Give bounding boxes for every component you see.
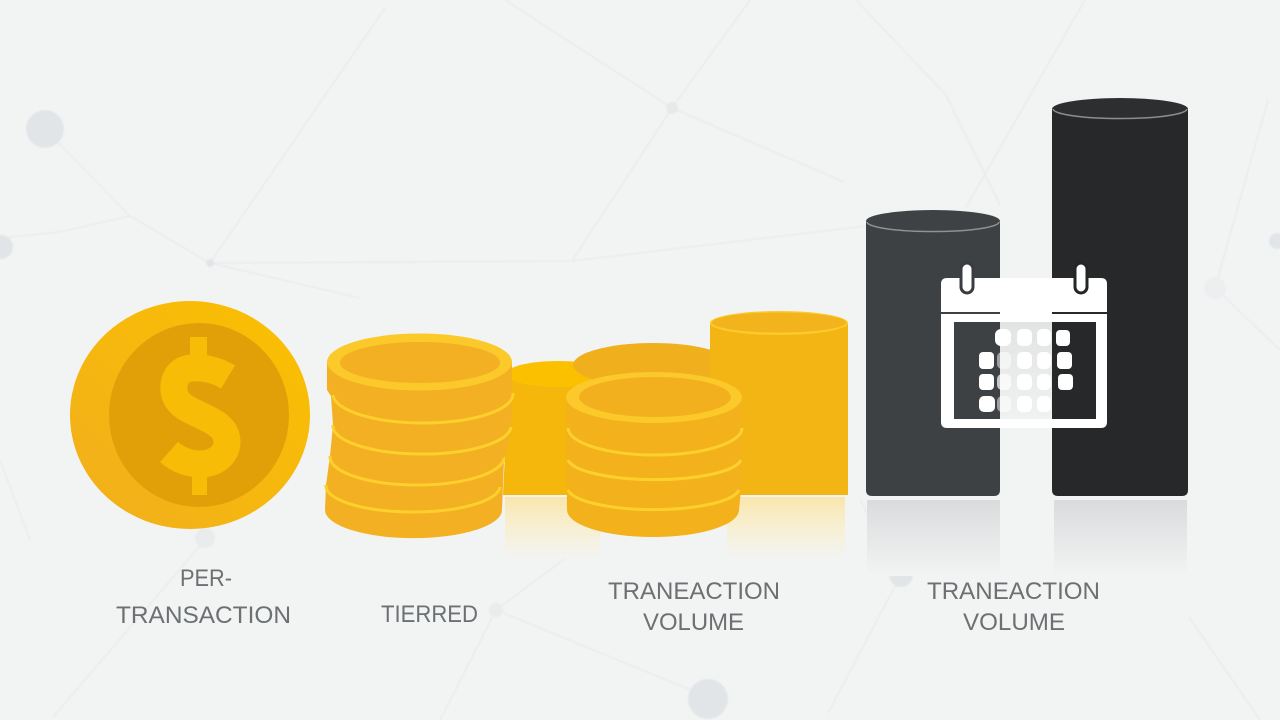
stack of coins: transaction volume — [566, 372, 742, 537]
label: transaction volume (yellow) — [608, 578, 780, 636]
short yellow cylinder — [503, 361, 610, 495]
label: transaction volume (dark): TRANEACTION — [927, 578, 1100, 605]
stack of coins: tiered — [325, 334, 513, 538]
dark tall cylinder — [1052, 98, 1188, 496]
icon: calendar — [941, 263, 1107, 428]
reflections under cylinders — [505, 497, 1187, 576]
label: transaction volume (yellow): VOLUME — [643, 609, 744, 636]
label: per-transaction: PER- — [180, 565, 232, 592]
label: per-transaction — [116, 565, 291, 629]
dollar sign — [169, 337, 228, 495]
calendar day cells — [979, 329, 1073, 412]
label: transaction volume (dark): VOLUME — [963, 609, 1065, 636]
calendar rings — [961, 263, 973, 293]
icon: dollar coin — [70, 301, 310, 529]
label: transaction volume (yellow): TRANEACTION — [608, 578, 780, 605]
label: per-transaction: TRANSACTION — [116, 602, 291, 629]
tall yellow cylinder — [710, 311, 848, 495]
label: transaction volume (dark) — [927, 578, 1100, 636]
label: tiered: TIERRED — [381, 601, 478, 628]
medium yellow cylinder — [573, 343, 733, 387]
dark short cylinder — [866, 210, 1000, 496]
